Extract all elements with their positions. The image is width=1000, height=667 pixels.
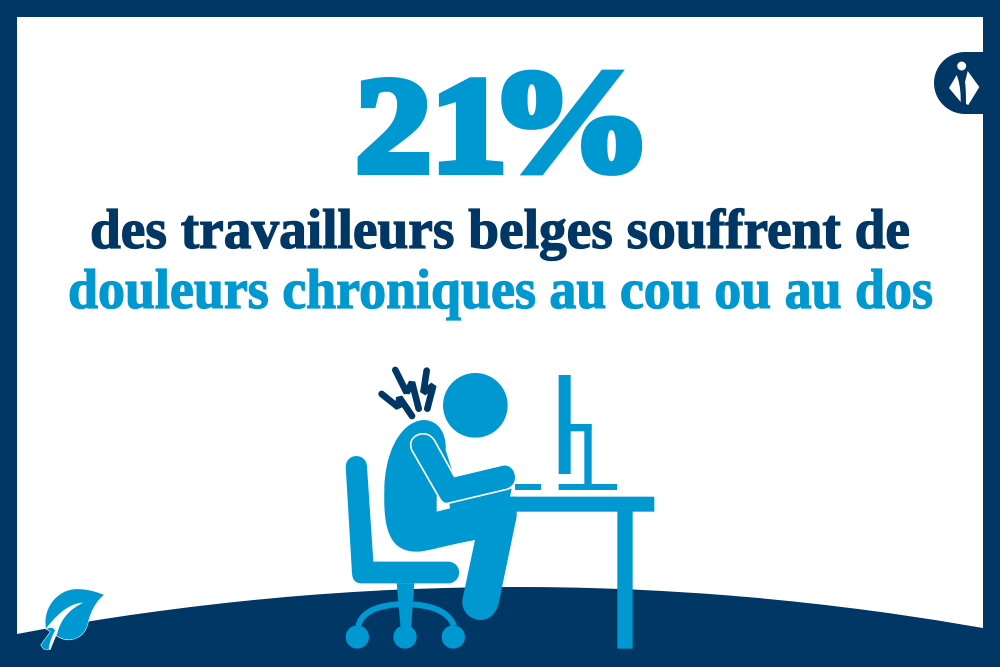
icon: chair	[346, 456, 465, 649]
logo: institution badge	[934, 52, 983, 114]
icon: desk	[503, 497, 654, 649]
icon: monitor and keyboard	[515, 375, 617, 490]
icon: head	[443, 373, 508, 438]
big percentage	[356, 42, 653, 202]
icon: seated body	[384, 420, 517, 620]
illustration: worker with neck pain at desk	[346, 370, 654, 649]
icon: arm	[412, 435, 515, 503]
heading line 2: douleurs chroniques au cou ou au dos	[68, 259, 933, 321]
heading line 1: des travailleurs belges souffrent de	[90, 199, 910, 261]
logo: leaf	[41, 589, 104, 649]
icon: pain bolts	[382, 370, 433, 416]
big percentage: %	[489, 42, 653, 202]
big percentage: 21	[356, 51, 507, 201]
